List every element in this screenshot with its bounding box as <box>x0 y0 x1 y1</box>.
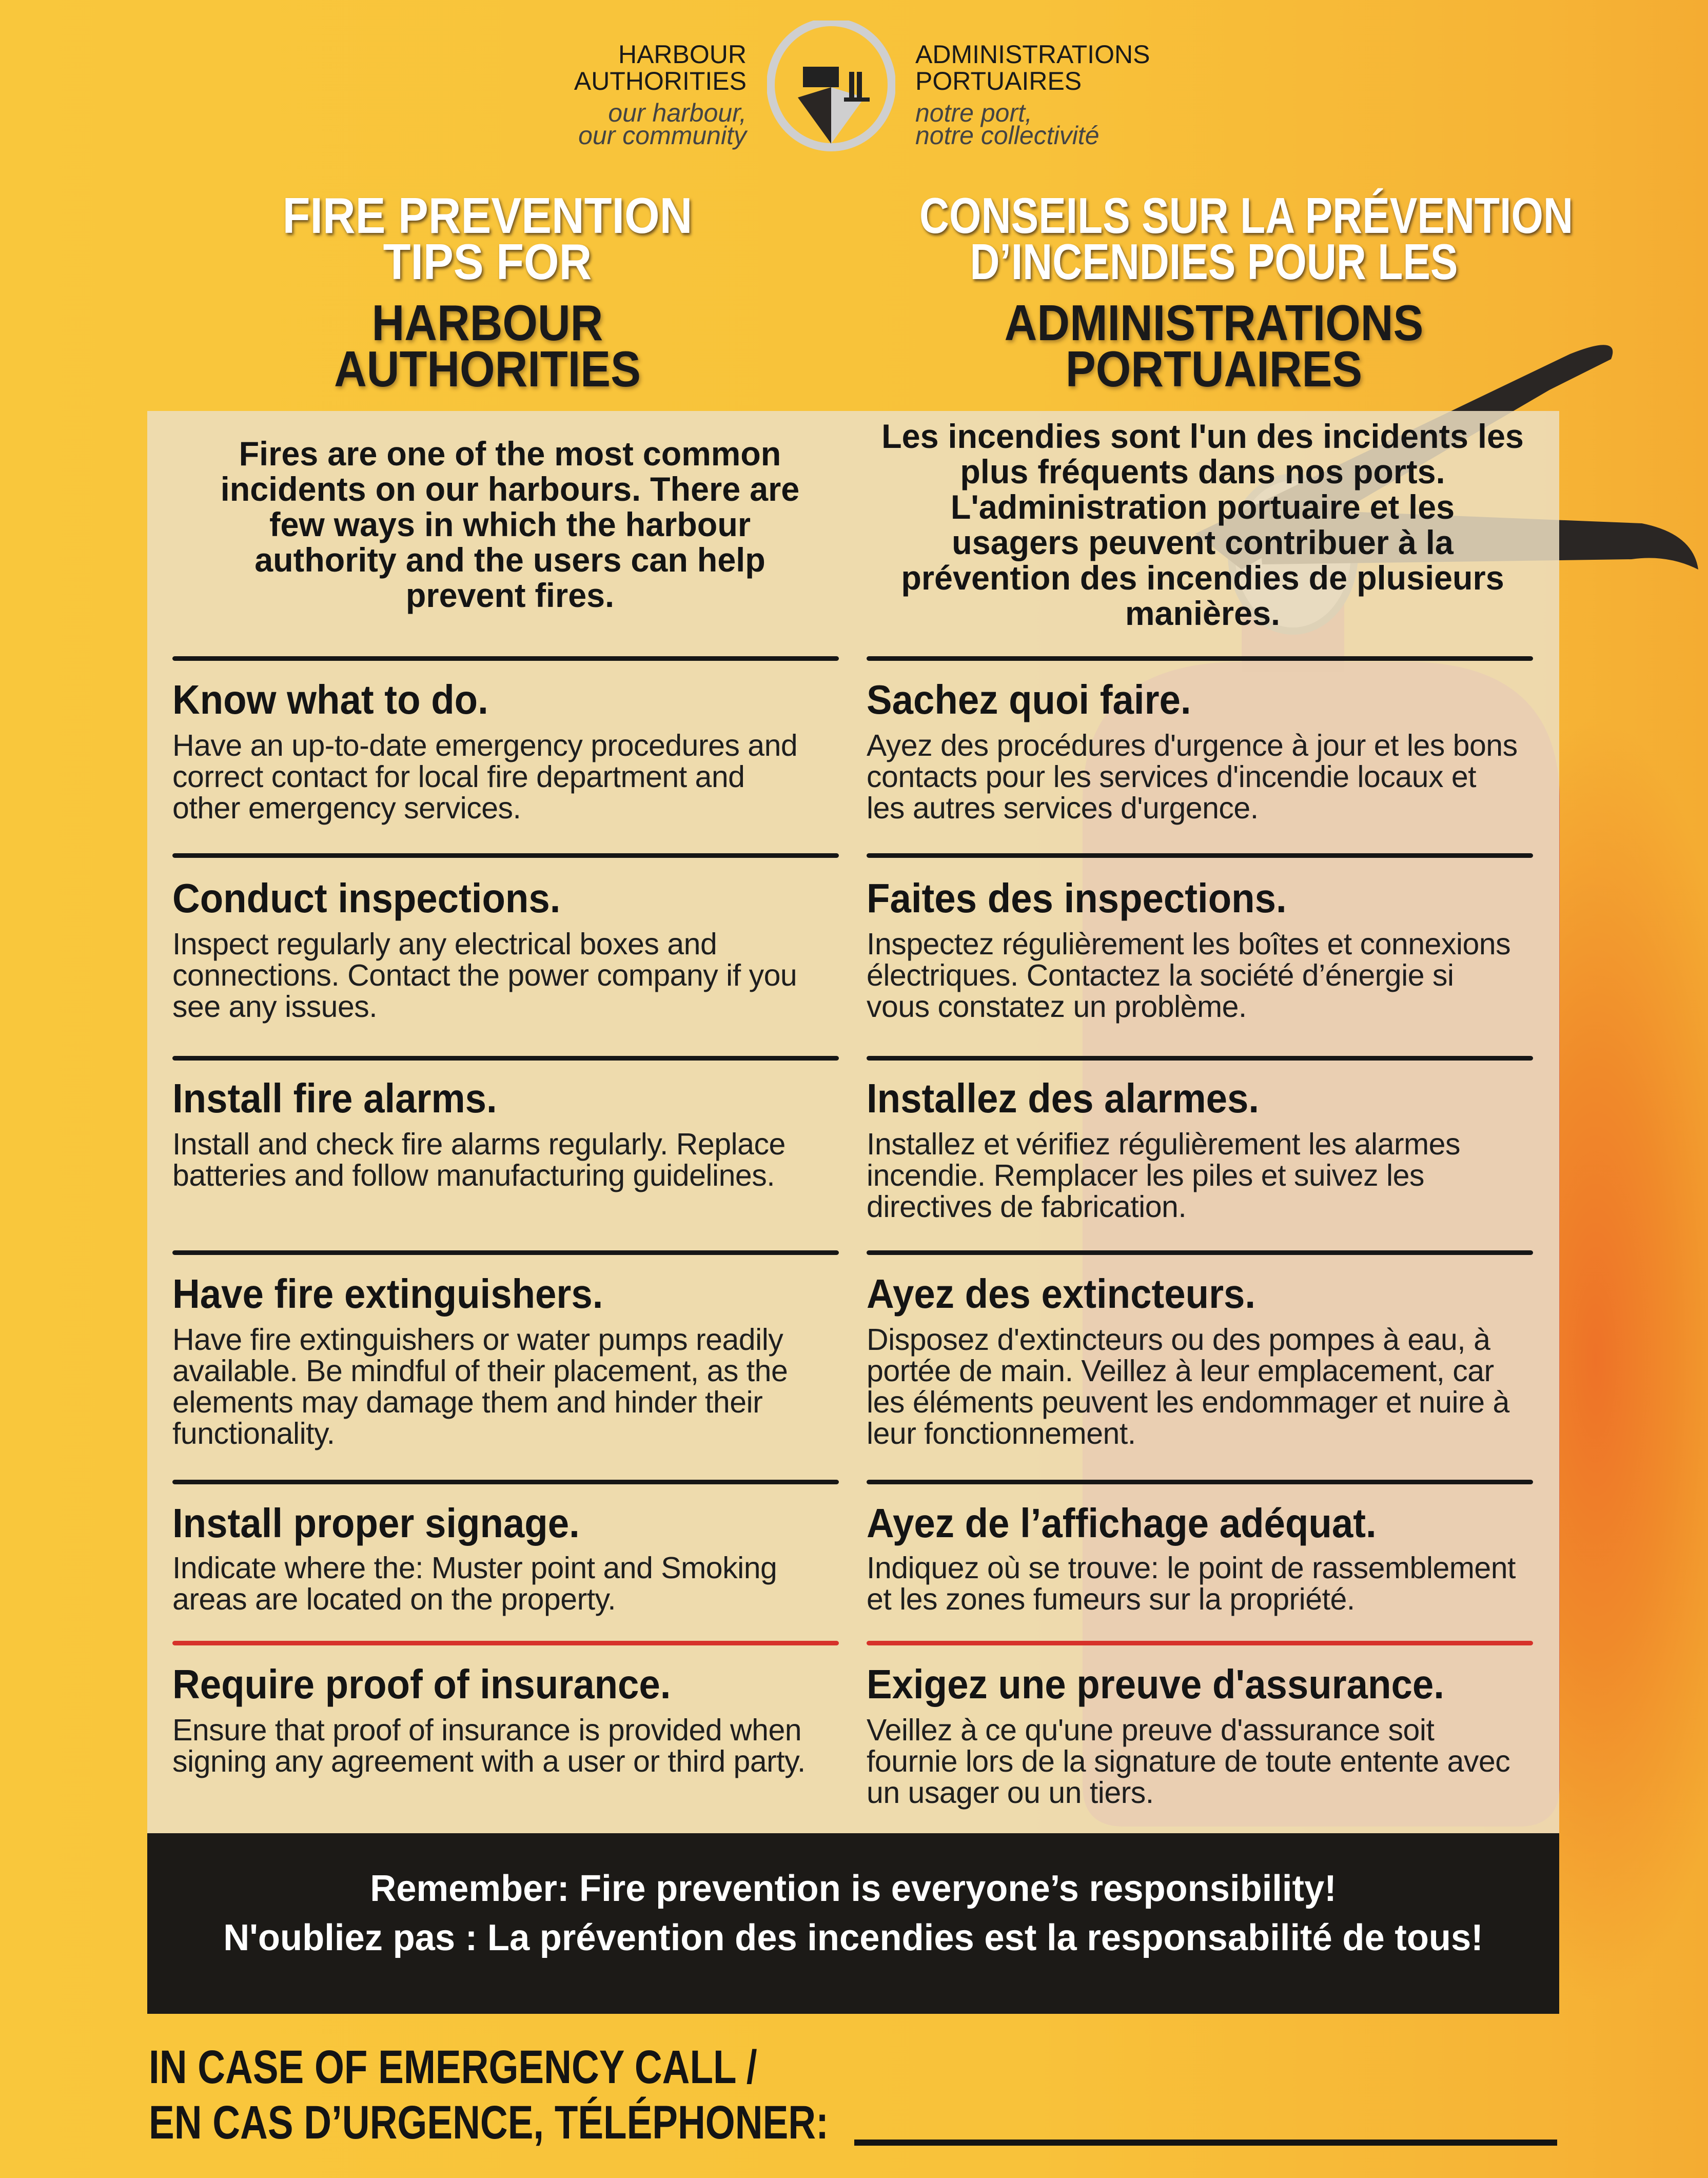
tip 4 english: Have fire extinguishers. <box>172 1271 603 1317</box>
tip 1 french: contacts pour les services d'incendie locaux et <box>867 760 1476 794</box>
tip 3 french: incendie. Remplacer les piles et suivez les <box>867 1159 1424 1192</box>
phone blank line <box>854 2140 1557 2146</box>
logo text: french: notre collectivité <box>915 121 1099 150</box>
emergency call text <box>149 2041 829 2149</box>
logo text: english: AUTHORITIES <box>574 67 747 95</box>
logo text: french: notre port, <box>915 99 1032 127</box>
intro: french: L'administration portuaire et les <box>951 488 1455 526</box>
tip 1 english: other emergency services. <box>172 791 521 825</box>
intro: french: plus fréquents dans nos ports. <box>960 453 1445 490</box>
tip 1 english: Have an up-to-date emergency procedures and <box>172 729 797 762</box>
tip 1 english <box>172 677 797 825</box>
tip 1 french: Sachez quoi faire. <box>867 677 1191 722</box>
main panel <box>147 411 1559 1833</box>
logo <box>574 21 1150 151</box>
tip 6 english: signing any agreement with a user or third party. <box>172 1744 806 1778</box>
tip 2 french: Inspectez régulièrement les boîtes et connexions <box>867 927 1510 961</box>
tip 1 french: Ayez des procédures d'urgence à jour et les bons <box>867 729 1518 762</box>
heading: french <box>919 187 1574 397</box>
tip 4 french <box>867 1271 1509 1450</box>
logo text: english <box>574 40 748 150</box>
tip 1 english: correct contact for local fire department and <box>172 760 744 794</box>
tip 3 french: directives de fabrication. <box>867 1190 1186 1224</box>
tip 6 french: Exigez une preuve d'assurance. <box>867 1661 1444 1707</box>
intro: french: Les incendies sont l'un des incidents les <box>881 417 1524 455</box>
heading: english: FIRE PREVENTION <box>283 187 692 244</box>
tip 2 english: Conduct inspections. <box>172 875 560 921</box>
heading: french: PORTUAIRES <box>1066 341 1362 397</box>
heading: french: ADMINISTRATIONS <box>1005 295 1423 351</box>
tip 5 french <box>867 1500 1516 1616</box>
tip 1 french <box>867 677 1518 825</box>
tip 2 french: Faites des inspections. <box>867 875 1287 921</box>
tip 6 english: Require proof of insurance. <box>172 1661 671 1707</box>
tip 3 english <box>172 1075 786 1192</box>
intro: english: incidents on our harbours. There are <box>221 470 799 508</box>
logo emblem <box>767 21 895 151</box>
tip 6 french: Veillez à ce qu'une preuve d'assurance soit <box>867 1713 1434 1747</box>
tip 4 french: Disposez d'extincteurs ou des pompes à eau, à <box>867 1323 1490 1357</box>
heading: english <box>283 187 693 397</box>
tip 6 english: Ensure that proof of insurance is provided when <box>172 1713 801 1747</box>
logo text: french: ADMINISTRATIONS <box>915 40 1150 69</box>
tip 5 english: Install proper signage. <box>172 1500 580 1546</box>
tip 2 french <box>867 875 1510 1024</box>
tip 2 french: vous constatez un problème. <box>867 990 1247 1024</box>
tip 3 french: Installez des alarmes. <box>867 1075 1259 1121</box>
heading: french: CONSEILS SUR LA PRÉVENTION <box>919 187 1573 244</box>
tip 6 english <box>172 1661 806 1778</box>
heading: english: TIPS FOR <box>383 233 592 290</box>
tip 6 french <box>867 1661 1510 1810</box>
tip 5 english: areas are located on the property. <box>172 1582 616 1616</box>
tip 5 french: et les zones fumeurs sur la propriété. <box>867 1582 1355 1616</box>
tip 3 english: Install fire alarms. <box>172 1075 497 1121</box>
tip 4 english: functionality. <box>172 1417 335 1450</box>
tip 2 english <box>172 875 797 1024</box>
tip 2 english: connections. Contact the power company if you <box>172 958 797 992</box>
tip 4 french: leur fonctionnement. <box>867 1417 1136 1450</box>
tip 3 french <box>867 1075 1460 1224</box>
tip 5 english: Indicate where the: Muster point and Smoking <box>172 1551 777 1585</box>
tip 6 french: un usager ou un tiers. <box>867 1776 1154 1810</box>
intro: french: usagers peuvent contribuer à la <box>952 523 1454 561</box>
tip 5 french: Indiquez où se trouve: le point de rassemblement <box>867 1551 1516 1585</box>
tip 5 english <box>172 1500 777 1616</box>
intro: french: prévention des incendies de plusieurs <box>901 559 1504 597</box>
intro: french: manières. <box>1125 594 1280 632</box>
emergency call text: IN CASE OF EMERGENCY CALL / <box>149 2041 757 2093</box>
tip 2 english: see any issues. <box>172 990 377 1024</box>
tip 4 english <box>172 1271 788 1450</box>
tip 4 english: Have fire extinguishers or water pumps readily <box>172 1323 783 1357</box>
tip 1 french: les autres services d'urgence. <box>867 791 1259 825</box>
dividers <box>172 656 839 661</box>
reminder banner: N'oubliez pas : La prévention des incendies est la responsabilité de tous! <box>223 1917 1483 1958</box>
tip 4 english: available. Be mindful of their placement, as the <box>172 1354 788 1388</box>
logo text: english: our community <box>578 121 747 150</box>
logo text: french <box>915 40 1150 150</box>
intro: french <box>881 417 1524 632</box>
reminder banner <box>147 1833 1559 2014</box>
intro: english <box>221 435 799 614</box>
logo text: french: PORTUAIRES <box>915 67 1082 95</box>
tip 4 french: les éléments peuvent les endommager et nuire à <box>867 1385 1509 1419</box>
emergency call text: EN CAS D’URGENCE, TÉLÉPHONER: <box>149 2096 829 2149</box>
heading: english: HARBOUR <box>372 295 603 351</box>
heading: english: AUTHORITIES <box>334 341 641 397</box>
tip 4 french: Ayez des extincteurs. <box>867 1271 1255 1317</box>
tip 2 english: Inspect regularly any electrical boxes and <box>172 927 717 961</box>
tip 4 english: elements may damage them and hinder their <box>172 1385 762 1419</box>
intro: english: few ways in which the harbour <box>269 505 751 543</box>
logo text: english: HARBOUR <box>618 40 747 69</box>
tip 3 english: Install and check fire alarms regularly. Replace <box>172 1127 786 1161</box>
tip 3 english: batteries and follow manufacturing guidelines. <box>172 1159 775 1192</box>
tip 5 french: Ayez de l’affichage adéquat. <box>867 1500 1377 1546</box>
heading: french: D’INCENDIES POUR LES <box>970 233 1458 290</box>
logo text: english: our harbour, <box>608 99 747 127</box>
intro: english: authority and the users can help <box>254 541 765 579</box>
tip 6 french: fournie lors de la signature de toute entente avec <box>867 1744 1510 1778</box>
intro: english: Fires are one of the most common <box>239 435 781 473</box>
tip 2 french: électriques. Contactez la société d’énergie si <box>867 958 1454 992</box>
tip 3 french: Installez et vérifiez régulièrement les alarmes <box>867 1127 1460 1161</box>
tip 1 english: Know what to do. <box>172 677 488 722</box>
tip 4 french: portée de main. Veillez à leur emplacement, car <box>867 1354 1494 1388</box>
reminder banner: Remember: Fire prevention is everyone’s responsibility! <box>370 1868 1337 1909</box>
intro: english: prevent fires. <box>406 576 614 614</box>
